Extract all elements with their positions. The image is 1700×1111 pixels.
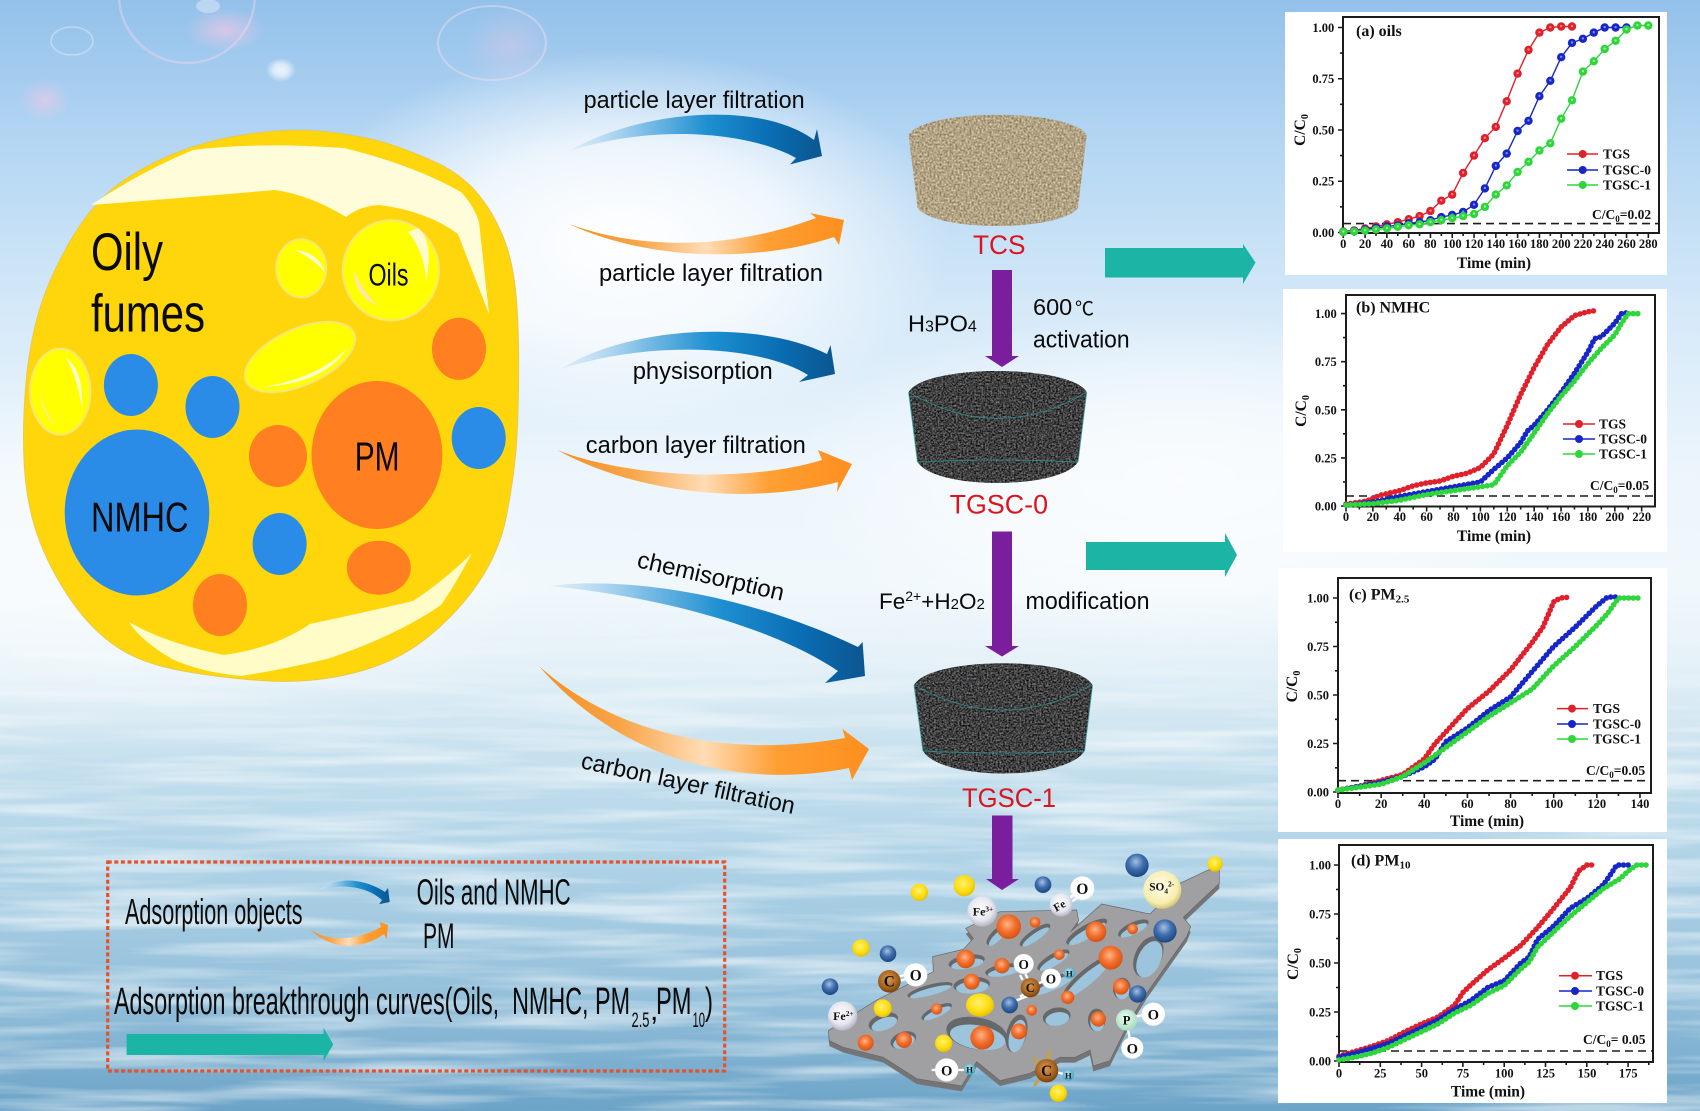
arrow: teal to panel a bbox=[1105, 244, 1256, 284]
axis labels c: (c) PM bbox=[1349, 587, 1396, 604]
label: TCS: TCS bbox=[973, 230, 1026, 260]
axis labels c: 0 bbox=[1292, 671, 1303, 676]
label: Fe2+ + H2O2: Fe bbox=[879, 589, 905, 614]
group O-H: O bbox=[941, 1063, 952, 1079]
label: 600 C activation: ℃ bbox=[1075, 299, 1094, 320]
axis labels d: 10 bbox=[1399, 860, 1411, 872]
TGSC-0 curve bbox=[1343, 28, 1626, 232]
axis labels d: 175 bbox=[1619, 1067, 1638, 1081]
ion SO4 2-: 4 bbox=[1164, 886, 1168, 895]
TGSC-1 curve bbox=[1339, 865, 1646, 1060]
atom Fe and O: Fe bbox=[1052, 898, 1068, 915]
TGSC-1 curve bbox=[1346, 314, 1642, 505]
TGS curve bbox=[1343, 26, 1572, 232]
axis labels b: C/C bbox=[1590, 478, 1613, 493]
orange PM particles bbox=[193, 318, 486, 636]
axis labels c bbox=[1284, 587, 1649, 830]
atom Fe2+ bbox=[828, 1001, 857, 1031]
icon: TGSC-1 carbon cylinder bbox=[914, 663, 1092, 774]
axis labels a: 60 bbox=[1402, 237, 1415, 251]
axis labels b: 0 bbox=[1301, 395, 1312, 400]
axis labels a: 220 bbox=[1574, 237, 1592, 251]
axis labels b: 0.25 bbox=[1315, 451, 1337, 465]
axis labels d: 75 bbox=[1457, 1067, 1469, 1081]
axis labels b: 1.00 bbox=[1315, 307, 1337, 321]
axis labels a: 240 bbox=[1595, 237, 1614, 251]
axis labels b: 220 bbox=[1632, 510, 1651, 524]
label: Fe2+ + H2O2: +H bbox=[921, 589, 951, 614]
group P=O: O bbox=[1127, 1041, 1138, 1057]
legend c: TGSC-1 bbox=[1593, 732, 1641, 746]
axis labels d: C/C bbox=[1583, 1032, 1606, 1047]
group carboxyl centre: O bbox=[1046, 971, 1056, 986]
axis labels c: 2.5 bbox=[1396, 594, 1410, 606]
legend a bbox=[1567, 146, 1651, 192]
TGSC-1 curve bbox=[1343, 26, 1648, 232]
arrow: purple TGSC-1 to structure bbox=[986, 816, 1019, 890]
label: Oily fumes: fumes bbox=[91, 285, 205, 344]
group O-H bbox=[935, 1058, 975, 1082]
panel a: oils breakthrough chart bbox=[1285, 12, 1667, 275]
arrow: orange particle layer filtration bbox=[569, 213, 844, 254]
icon: TCS sand cylinder bbox=[909, 115, 1087, 226]
arrow: blue physisorption bbox=[561, 332, 835, 382]
label: Fe2+ + H2O2: 2+ bbox=[905, 588, 921, 604]
label: 600 C activation bbox=[1033, 294, 1130, 354]
label: particle layer filtration bottom: particle layer filtration bbox=[599, 260, 823, 287]
axis labels c: 0 bbox=[1609, 770, 1614, 780]
TGSC-0 curve bbox=[1346, 313, 1628, 505]
axis labels c: 1.00 bbox=[1307, 592, 1329, 606]
panel b: NMHC breakthrough chart bbox=[1283, 289, 1667, 552]
axis labels d: 1.00 bbox=[1309, 858, 1331, 872]
label: 600 C activation: activation bbox=[1033, 327, 1130, 354]
axis labels b: 200 bbox=[1605, 510, 1624, 524]
axis labels a: 0 bbox=[1300, 114, 1311, 119]
axis labels a: 0 bbox=[1615, 214, 1620, 224]
arrow: orange carbon layer filtration lower bbox=[539, 666, 869, 780]
blue NMHC balls bbox=[822, 854, 1177, 1013]
atom Fe2+: 2+ bbox=[846, 1009, 854, 1018]
group C=O left: C bbox=[884, 974, 895, 991]
legend d bbox=[1559, 968, 1644, 1014]
legend a: TGS bbox=[1603, 146, 1630, 162]
axis labels b: 80 bbox=[1447, 510, 1460, 524]
axis labels a: 100 bbox=[1443, 237, 1462, 251]
axis labels c: 100 bbox=[1544, 797, 1563, 811]
axis labels a: C/C bbox=[1592, 207, 1615, 222]
legend a: TGSC-1 bbox=[1603, 178, 1651, 192]
axis labels a: C/C bbox=[1292, 119, 1309, 146]
group CH3: H bbox=[1065, 1070, 1072, 1080]
axis labels a: 140 bbox=[1486, 237, 1505, 251]
label: Oily fumes: Oily bbox=[91, 224, 163, 282]
label: Adsorption breakthrough curves: ) bbox=[705, 981, 713, 1023]
group CH3: C bbox=[1041, 1063, 1052, 1080]
axis labels d: 25 bbox=[1374, 1067, 1387, 1081]
icon: small oil droplet bbox=[276, 239, 326, 297]
axis labels d: 0.00 bbox=[1309, 1054, 1331, 1068]
axis labels d: 0 bbox=[1336, 1067, 1342, 1081]
legend b: TGS bbox=[1599, 416, 1626, 432]
panel: porous carbon structure with adsorbates bbox=[822, 854, 1223, 1102]
panel: oily fumes droplet bbox=[24, 130, 519, 681]
axis labels d: 50 bbox=[1415, 1067, 1428, 1081]
axis labels a: 280 bbox=[1639, 237, 1658, 251]
atom Fe and O bbox=[1050, 876, 1094, 917]
axis labels c: C/C bbox=[1586, 763, 1609, 778]
axis labels d: Time (min) bbox=[1451, 1084, 1525, 1100]
TGS curve bbox=[1339, 865, 1595, 1056]
label: Adsorption breakthrough curves: 2.5 bbox=[632, 1009, 650, 1032]
legend d: TGSC-1 bbox=[1596, 998, 1644, 1014]
legend c: TGSC-0 bbox=[1593, 716, 1641, 732]
ion SO4 2-: 2- bbox=[1168, 880, 1175, 889]
arrow: blue particle layer filtration bbox=[569, 115, 822, 164]
axis labels c: 140 bbox=[1631, 797, 1649, 811]
bonds bbox=[899, 895, 1143, 1074]
atom Fe and O: O bbox=[1076, 881, 1088, 898]
group carboxyl centre bbox=[1014, 954, 1075, 997]
label: particle layer filtration top: particle layer filtration bbox=[584, 87, 805, 114]
arrow: teal to panel b/c bbox=[1086, 533, 1237, 577]
atom Fe3+: 3+ bbox=[985, 905, 993, 914]
axis labels b: 0 bbox=[1343, 510, 1349, 524]
axis labels b: 0 bbox=[1613, 485, 1618, 495]
axis labels a: Time (min) bbox=[1457, 255, 1531, 272]
axis labels a: 20 bbox=[1359, 237, 1371, 251]
group O-H: H bbox=[966, 1065, 973, 1075]
atom Fe3+: Fe bbox=[973, 905, 985, 919]
axis labels a: 260 bbox=[1617, 237, 1636, 251]
axis labels a: 0.50 bbox=[1312, 124, 1334, 138]
arrow: purple TGSC-0 to TGSC-1 bbox=[985, 532, 1019, 656]
icon: TGSC-0 carbon cylinder bbox=[909, 371, 1087, 483]
axis labels b: 20 bbox=[1367, 510, 1379, 524]
axis labels c: Time (min) bbox=[1450, 813, 1524, 830]
axis labels a: 0.25 bbox=[1312, 175, 1334, 189]
axis labels a: 1.00 bbox=[1312, 21, 1334, 35]
axis labels a: 0.75 bbox=[1312, 72, 1334, 86]
axis labels b bbox=[1293, 300, 1651, 545]
label: Oily fumes bbox=[91, 224, 205, 344]
ion SO4 2-: SO bbox=[1149, 882, 1164, 894]
label: carbon layer filtration: carbon layer filtration bbox=[586, 432, 806, 459]
legend a: TGSC-0 bbox=[1603, 162, 1651, 178]
axis labels b: (b) NMHC bbox=[1356, 300, 1430, 316]
orange PM balls bbox=[858, 914, 1138, 1051]
label: Oils and NMHC: Oils and NMHC bbox=[417, 871, 571, 912]
axis labels c: 80 bbox=[1504, 797, 1517, 811]
group carboxyl centre: O bbox=[1018, 957, 1029, 972]
axis labels b: 0.00 bbox=[1315, 500, 1337, 514]
axis labels a: 40 bbox=[1381, 237, 1393, 251]
panel c: PM2.5 breakthrough chart bbox=[1278, 568, 1667, 832]
axis labels a: 80 bbox=[1424, 237, 1437, 251]
axis labels b: =0.05 bbox=[1618, 478, 1649, 493]
icon: oil droplet labelled Oils bbox=[343, 220, 439, 320]
porous carbon sheet bbox=[828, 870, 1219, 1091]
TGS curve bbox=[1338, 597, 1571, 790]
legend b: TGSC-0 bbox=[1599, 432, 1647, 446]
yellow oil balls bbox=[852, 856, 1223, 1102]
legend c bbox=[1557, 701, 1641, 746]
legend c: TGS bbox=[1593, 701, 1620, 716]
icon: left oil droplet bbox=[30, 349, 90, 435]
axis labels b: C/C bbox=[1293, 400, 1310, 427]
group P=O: O bbox=[1148, 1008, 1159, 1024]
group C=O left: O bbox=[910, 968, 922, 985]
axis labels c: 40 bbox=[1418, 797, 1431, 811]
axis labels b: 180 bbox=[1579, 510, 1597, 524]
axis labels c: 0.75 bbox=[1307, 640, 1329, 654]
axis labels d: (d) PM bbox=[1351, 853, 1399, 870]
axis labels b: 100 bbox=[1471, 510, 1490, 524]
label: Adsorption objects: Adsorption objects bbox=[125, 891, 303, 932]
TGS curve bbox=[1346, 311, 1595, 504]
axis labels b: 40 bbox=[1394, 510, 1406, 524]
label: Fe2+ + H2O2: 2O2 bbox=[951, 589, 985, 614]
axis labels b: 60 bbox=[1420, 510, 1433, 524]
axis labels a: 0 bbox=[1340, 237, 1346, 251]
label: NMHC: NMHC bbox=[91, 494, 189, 541]
axis labels b: Time (min) bbox=[1457, 528, 1531, 545]
legend d: TGSC-0 bbox=[1596, 984, 1644, 998]
legend b bbox=[1563, 416, 1647, 462]
axis labels d: = 0.05 bbox=[1611, 1032, 1646, 1047]
panel d: PM10 breakthrough chart bbox=[1278, 839, 1667, 1103]
ion SO4 2- bbox=[1143, 871, 1181, 909]
group carboxyl centre: H bbox=[1066, 968, 1073, 978]
label: PM: PM bbox=[423, 917, 454, 956]
label: TGSC-0: TGSC-0 bbox=[950, 490, 1048, 520]
label: TGSC-1: TGSC-1 bbox=[962, 783, 1056, 813]
legend d: TGS bbox=[1596, 968, 1623, 983]
axis labels c: 0.00 bbox=[1307, 786, 1329, 800]
axis labels c: =0.05 bbox=[1614, 763, 1645, 778]
group C=O left bbox=[878, 963, 927, 993]
axis labels d: 150 bbox=[1578, 1067, 1596, 1081]
axis labels a: 120 bbox=[1465, 237, 1483, 251]
axis labels a: 200 bbox=[1552, 237, 1571, 251]
axis labels c: 0.25 bbox=[1307, 737, 1329, 751]
axis labels d: C/C bbox=[1285, 953, 1302, 980]
atom Fe2+: Fe bbox=[833, 1009, 846, 1023]
group CH3 bbox=[1033, 1050, 1074, 1086]
axis labels c: 60 bbox=[1461, 797, 1474, 811]
axis labels d: 0.50 bbox=[1309, 956, 1331, 970]
axis labels b: 0.75 bbox=[1315, 355, 1337, 369]
axis labels c: 0.50 bbox=[1307, 688, 1329, 702]
arrow: blue chemisorption bbox=[548, 583, 865, 683]
axis labels d: 100 bbox=[1495, 1067, 1514, 1081]
label: Adsorption breakthrough curves bbox=[114, 981, 713, 1032]
icon: elongated oil droplet bbox=[235, 307, 365, 407]
axis labels b: 120 bbox=[1498, 510, 1517, 524]
axis labels d: 0.25 bbox=[1309, 1006, 1331, 1020]
group P=O bbox=[1116, 1003, 1165, 1059]
group carboxyl centre: C bbox=[1026, 981, 1035, 995]
legend b: TGSC-1 bbox=[1599, 446, 1647, 462]
axis labels d: 0 bbox=[1293, 948, 1304, 953]
arrow: legend teal bbox=[127, 1028, 333, 1061]
label: PM: PM bbox=[355, 434, 400, 479]
axis labels b: 140 bbox=[1525, 510, 1544, 524]
axis labels c: 120 bbox=[1587, 797, 1606, 811]
label: carbon layer filtration lower: carbon layer filtration bbox=[579, 747, 798, 820]
axis labels c: 20 bbox=[1375, 797, 1387, 811]
label: H3PO4: H3PO4 bbox=[908, 311, 977, 337]
axis labels c: C/C bbox=[1284, 676, 1301, 702]
axis labels a: 0.00 bbox=[1312, 226, 1334, 240]
label: chemisorption: chemisorption bbox=[635, 547, 787, 607]
label: 600 C activation: 600 bbox=[1033, 294, 1072, 320]
group P=O: P bbox=[1123, 1014, 1131, 1028]
TGSC-0 curve bbox=[1338, 597, 1618, 790]
axis labels a: 160 bbox=[1508, 237, 1527, 251]
TGSC-0 curve bbox=[1339, 865, 1628, 1057]
label: Adsorption breakthrough curves: , bbox=[650, 994, 658, 1027]
panel: legend box bbox=[108, 862, 725, 1071]
axis labels c: 0 bbox=[1335, 797, 1341, 811]
arrow: legend blue bbox=[319, 880, 390, 904]
arrow: legend orange bbox=[310, 922, 388, 946]
axis labels a bbox=[1292, 21, 1658, 272]
label: Adsorption breakthrough curves: Adsorption breakthrough curves(Oils, NMHC, PM bbox=[114, 981, 630, 1023]
axis labels b: 160 bbox=[1552, 510, 1570, 524]
axis labels a: =0.02 bbox=[1620, 207, 1651, 222]
label: physisorption: physisorption bbox=[633, 358, 773, 385]
icon: oil droplet labelled Oils: Oils bbox=[368, 257, 408, 292]
label: modification: modification bbox=[1026, 588, 1150, 615]
axis labels a: 180 bbox=[1530, 237, 1549, 251]
axis labels b: 0.50 bbox=[1315, 403, 1337, 417]
axis labels d: 125 bbox=[1536, 1067, 1555, 1081]
label: Adsorption breakthrough curves: 10 bbox=[692, 1009, 705, 1032]
TGSC-1 curve bbox=[1338, 598, 1640, 790]
axis labels d bbox=[1285, 853, 1646, 1100]
axis labels d: 0 bbox=[1606, 1039, 1611, 1049]
atom Fe3+ bbox=[967, 897, 997, 927]
label: Adsorption breakthrough curves: PM bbox=[656, 981, 692, 1023]
axis labels d: 0.75 bbox=[1309, 908, 1331, 922]
arrow: orange carbon layer filtration bbox=[557, 450, 852, 494]
axis labels a: (a) oils bbox=[1356, 23, 1402, 40]
arrow: purple TCS to TGSC-0 bbox=[985, 270, 1019, 367]
blue NMHC particles bbox=[65, 354, 506, 596]
